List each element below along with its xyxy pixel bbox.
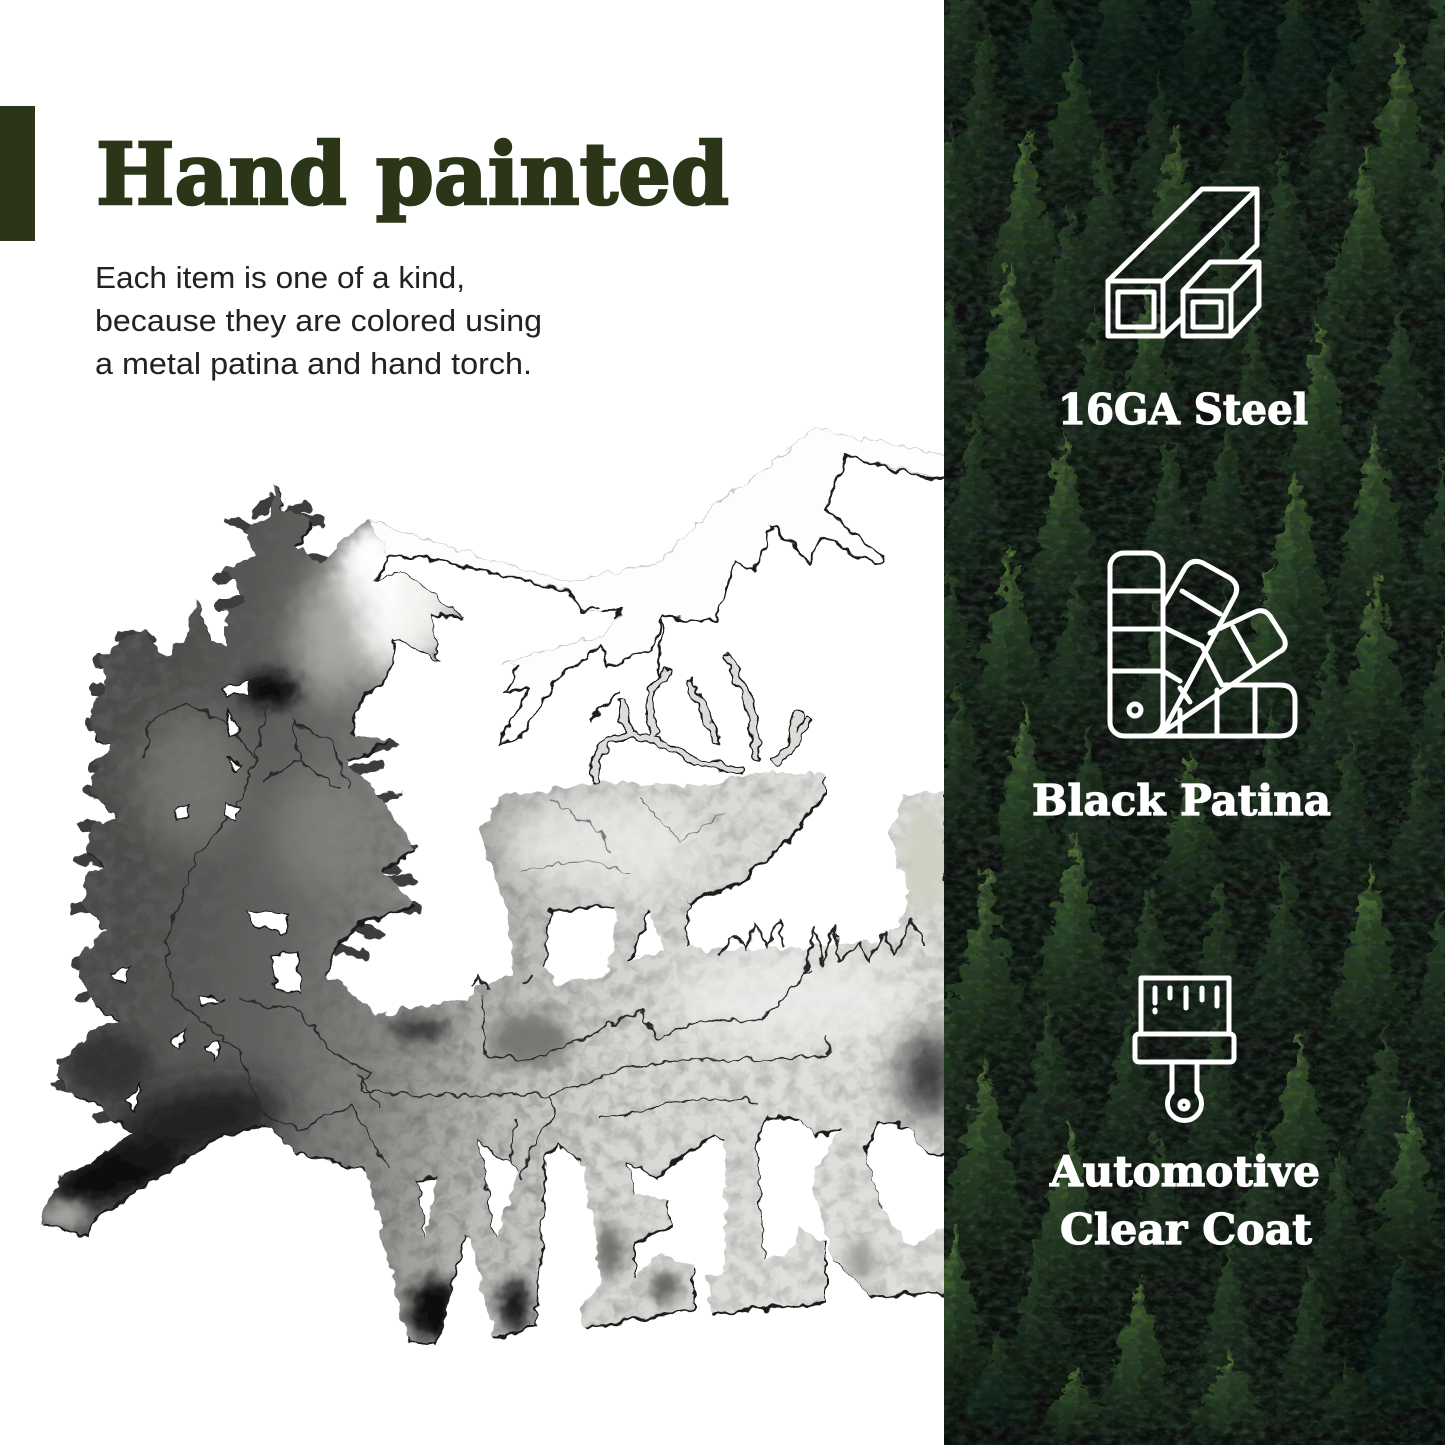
icon: paint brush [1135, 978, 1234, 1121]
meadow grass [470, 920, 925, 990]
metal sculpture: welcome sign with trees, mountains and elk [30, 429, 958, 1360]
label: Black Patina: Black Patina [1032, 776, 1331, 825]
label: Automotive Clear Coat: Automotive [1049, 1147, 1320, 1196]
sculpture shadow [40, 484, 952, 1348]
tree cut-out holes [110, 682, 302, 1110]
surface blemishes on elk [520, 800, 725, 875]
heading: Hand painted [96, 125, 729, 225]
description text: because they are colored using [95, 303, 542, 338]
icon: steel tubes [1108, 189, 1259, 336]
forest photo panel [899, 0, 1445, 1445]
label: 16GA Steel: 16GA Steel [1058, 385, 1308, 434]
elk antlers [594, 657, 807, 780]
icon: colour swatch fan [1110, 553, 1295, 736]
description text [95, 260, 542, 381]
tree branch fingers [58, 500, 415, 1118]
patina veins [145, 700, 830, 1180]
patina shading [30, 470, 958, 1360]
label: Automotive Clear Coat [1049, 1147, 1320, 1254]
description text: Each item is one of a kind, [95, 260, 465, 295]
accent bar [0, 106, 35, 241]
description text: a metal patina and hand torch. [95, 346, 532, 381]
main metal body [39, 482, 950, 1346]
forest trees [899, 0, 1445, 1442]
mountains [367, 429, 950, 744]
label: Automotive Clear Coat: Clear Coat [1060, 1205, 1313, 1254]
